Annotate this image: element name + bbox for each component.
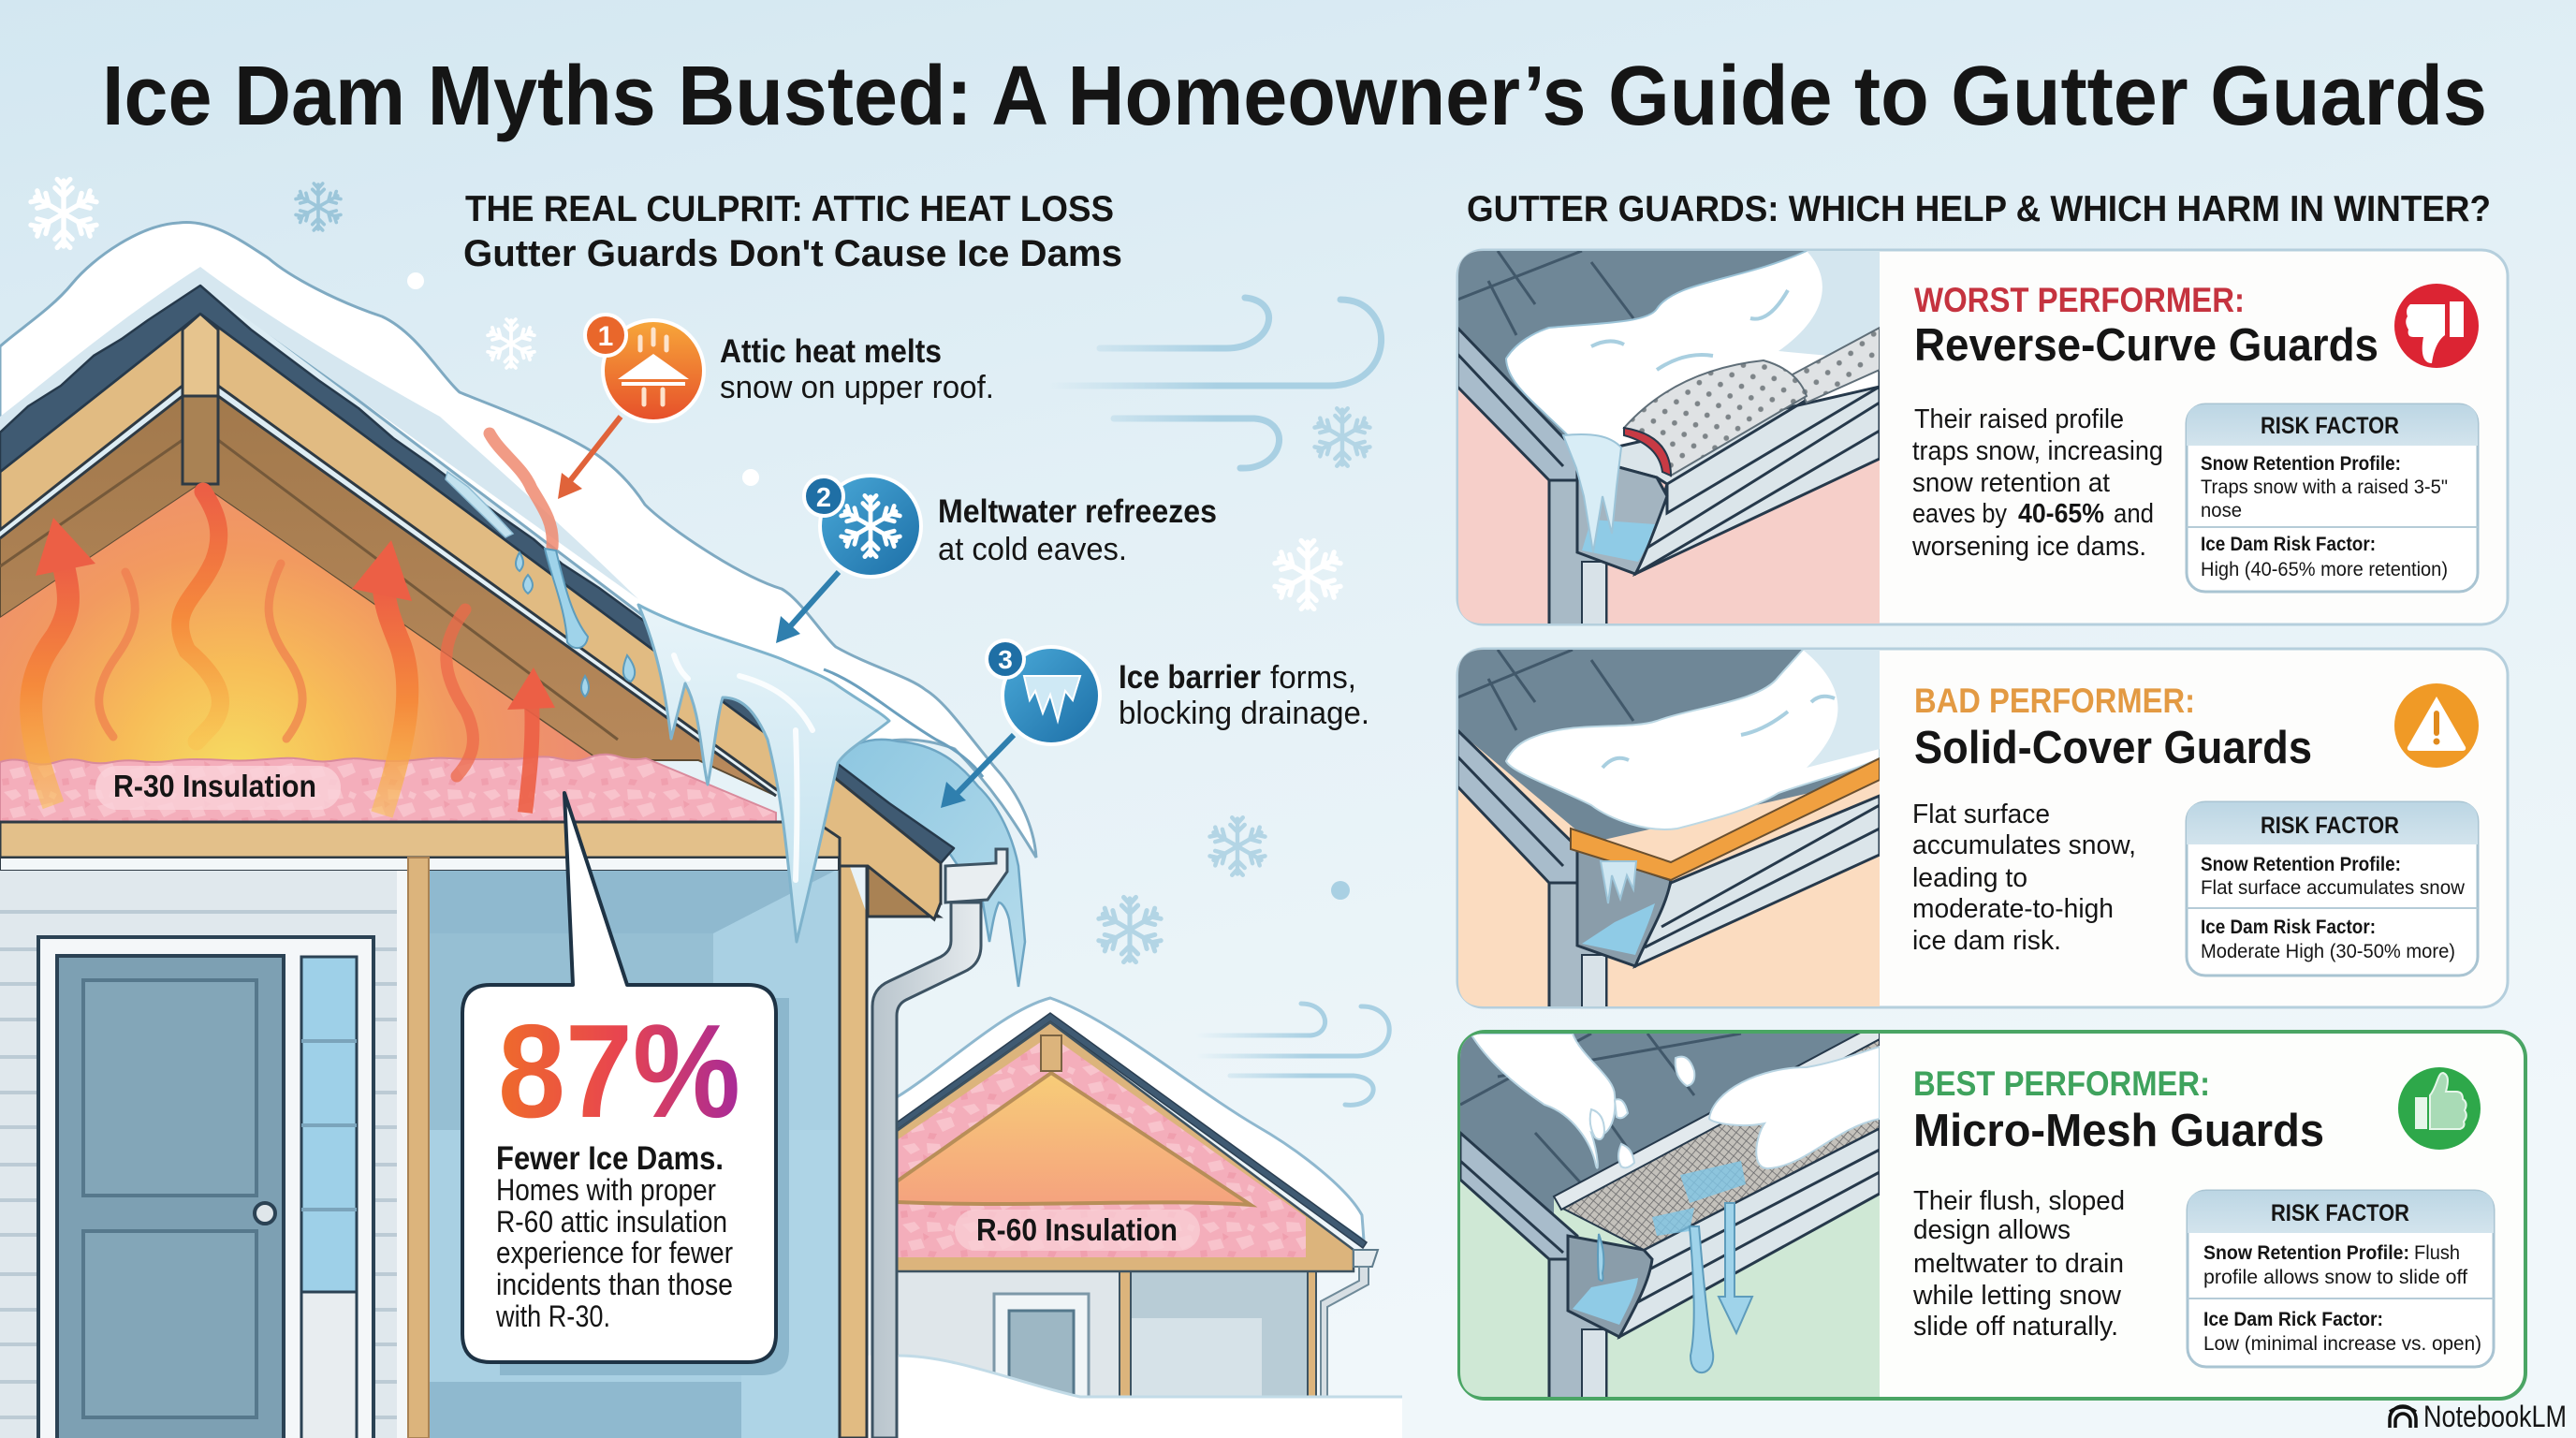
icicles [1601,861,1636,903]
risk factor box [2188,1191,2494,1367]
water on mesh [1652,1161,1746,1236]
small house insulation [897,1035,1306,1257]
small house snow [897,998,1364,1240]
orange solid cover [1571,758,1880,880]
title: Ice Dam Myths Busted: A Homeowner’s Guide to Gutter Guards [102,50,2487,143]
gutter face [1619,1128,1880,1337]
attic interior [0,484,604,764]
wood rafters [0,314,941,902]
small house roof [897,1013,1367,1248]
stat text [495,1173,733,1333]
description: snow retention at [1912,468,2110,498]
water runoff [1690,1226,1713,1372]
arrow 2 [776,572,839,643]
risk factor box: Flat surface accumulates snow [2201,877,2466,899]
callout 87% [462,793,789,1375]
card frame [1457,649,2508,1007]
description: Their flush, sloped [1913,1186,2125,1216]
risk factor box: Moderate High (30-50% more) [2201,941,2455,962]
stat text: with R-30. [495,1299,610,1333]
rake board [1457,328,1577,480]
description: meltwater to drain [1913,1249,2124,1279]
left siding wall [0,858,839,1438]
arrow 3 [941,735,1014,808]
icon: attic heat [585,315,704,421]
step 2 [776,476,1217,643]
description: accumulates snow, [1912,830,2136,860]
shingles [0,286,954,863]
icon: thumbs up [2398,1067,2481,1150]
mesh guard [1561,1039,1880,1250]
heat arrows [31,518,555,814]
description [1912,1186,2125,1342]
description: worsening ice dams. [1911,532,2146,562]
ice highlights [674,655,812,880]
small house gable wood [897,1022,1354,1271]
risk factor box: nose [2201,500,2242,521]
description: design allows [1913,1215,2071,1245]
stat heading: Fewer Ice Dams. [496,1140,724,1177]
description: moderate-to-high [1912,894,2114,924]
snow shading [0,267,638,599]
risk factor box [2187,802,2478,976]
illustration: solid-cover gutter [1457,648,1880,1011]
description: Flat surface [1912,800,2050,829]
risk factor box: Low (minimal increase vs. open) [2203,1333,2481,1355]
best label: BEST PERFORMER: [1913,1064,2210,1103]
panel: best performer card [1459,1022,2525,1400]
description: 40-65% [2018,499,2104,529]
stat number: 87% [498,997,740,1146]
description: eaves by [1912,499,2007,529]
bad label: BAD PERFORMER: [1914,682,2195,720]
perforated guard [1793,328,1880,403]
text 3: forms, [1270,660,1356,696]
risk factor box: RISK FACTOR [2261,813,2399,839]
R-30 label: R-30 Insulation [113,769,316,803]
icicles [1563,434,1621,552]
risk factor box: profile allows snow to slide off [2203,1267,2467,1288]
gutter [1619,386,1880,577]
risk factor box: RISK FACTOR [2261,413,2399,439]
ground snow [867,1355,1402,1438]
risk factor box: Snow Retention Profile: [2203,1242,2409,1264]
stat text: experience for fewer [496,1236,733,1269]
snow lines on ice edge [824,669,983,777]
icon: ice barrier [987,640,1100,744]
porch blue wall [429,871,839,1438]
guard name: Reverse-Curve Guards [1914,320,2378,371]
text 1: snow on upper roof. [720,370,994,405]
left heading: THE REAL CULPRIT: ATTIC HEAT LOSS [465,189,1114,229]
card frame [1457,250,2508,624]
panel: bad performer card [1457,648,2508,1011]
insulation R-30 [0,755,776,822]
description [1911,404,2163,562]
card frame [1459,1032,2525,1399]
description: ice dam risk. [1912,926,2061,956]
text 3: Ice barrier [1119,659,1261,696]
snowflakes and dots [30,180,1370,962]
rake board [1460,1133,1577,1259]
illustration: reverse-curve gutter [1457,249,1880,627]
guard name: Solid-Cover Guards [1914,723,2312,773]
arrow 1 [558,417,621,499]
wind swirls top [1048,298,1382,468]
text 1: Attic heat melts [720,333,942,370]
risk factor box: Traps snow with a raised 3-5" [2201,477,2448,498]
icon: attic heat: 1 [598,321,613,352]
description [1912,800,2136,956]
water trickle and meltwater [446,433,635,697]
risk factor box: Flush [2414,1242,2460,1264]
snow clumps [1471,1034,1615,1168]
text 2: Meltwater refreezes [938,493,1217,530]
icon: snowflake [804,476,921,577]
main house [0,223,1036,1438]
small house with R-60 insulation [897,998,1378,1397]
text 2 [938,493,1217,567]
stat text: R-60 attic insulation [496,1205,727,1239]
right heading: GUTTER GUARDS: WHICH HELP & WHICH HARM IN WINTER? [1467,189,2491,229]
icon: snowflake: 2 [816,483,831,513]
small house walls [897,1271,1316,1397]
risk factor box: High (40-65% more retention) [2201,559,2448,580]
text 2: at cold eaves. [938,532,1127,567]
downspout [1549,1259,1606,1400]
risk factor box: Ice Dam Risk Factor: [2201,534,2376,555]
wind swirls bottom [1195,1004,1389,1105]
beam [0,822,840,858]
stat text: Homes with proper [496,1173,716,1207]
downspout [1549,480,1606,626]
risk factor box: Ice Dam Risk Factor: [2201,917,2376,938]
icon: thumbs down [2394,284,2479,368]
worst label: WORST PERFORMER: [1914,281,2245,319]
rafter thin lines [0,440,618,740]
gutter [1635,796,1880,966]
illustration: micro-mesh gutter [1460,1022,1880,1400]
icicles left ice mass [638,605,889,942]
step 3 [941,640,1369,808]
step 1 [558,315,994,499]
door [38,937,373,1438]
rake board [1457,730,1577,883]
panel: worst performer card [1457,249,2508,627]
left heading [463,189,1122,274]
guard name: Micro-Mesh Guards [1913,1106,2324,1156]
icon: ice barrier: 3 [998,645,1013,674]
snow load on roof [0,223,1036,858]
downspout [1549,883,1606,1010]
small house gutter [1321,1250,1378,1397]
text 3 [1119,659,1369,731]
left heading: Gutter Guards Don't Cause Ice Dams [463,233,1122,274]
callout shadow [500,998,789,1375]
gutter and downspout [872,849,1007,1438]
R-60 label: R-60 Insulation [976,1212,1178,1247]
callout bubble [462,793,776,1362]
risk factor box: RISK FACTOR [2271,1200,2409,1226]
description: traps snow, increasing [1912,436,2163,466]
risk factor box: Snow Retention Profile: [2201,854,2401,875]
risk factor box: Ice Dam Rick Factor: [2203,1309,2383,1330]
porch posts [408,774,941,1438]
description: while letting snow [1912,1281,2122,1311]
small house attic [897,1073,1251,1205]
text 3: blocking drainage. [1119,696,1369,731]
text 1 [720,333,994,405]
description: Their raised profile [1914,404,2124,434]
blue ice dam [824,740,1025,987]
stat text: incidents than those [496,1268,733,1301]
icon: warning [2394,683,2479,768]
brown rafter shadow bands [0,396,776,796]
risk factor box [2187,404,2478,592]
risk factor box: Snow Retention Profile: [2201,453,2401,475]
heat squiggles [99,492,473,776]
description: and [2114,499,2154,529]
description: slide off naturally. [1913,1312,2118,1342]
description: leading to [1912,863,2027,893]
